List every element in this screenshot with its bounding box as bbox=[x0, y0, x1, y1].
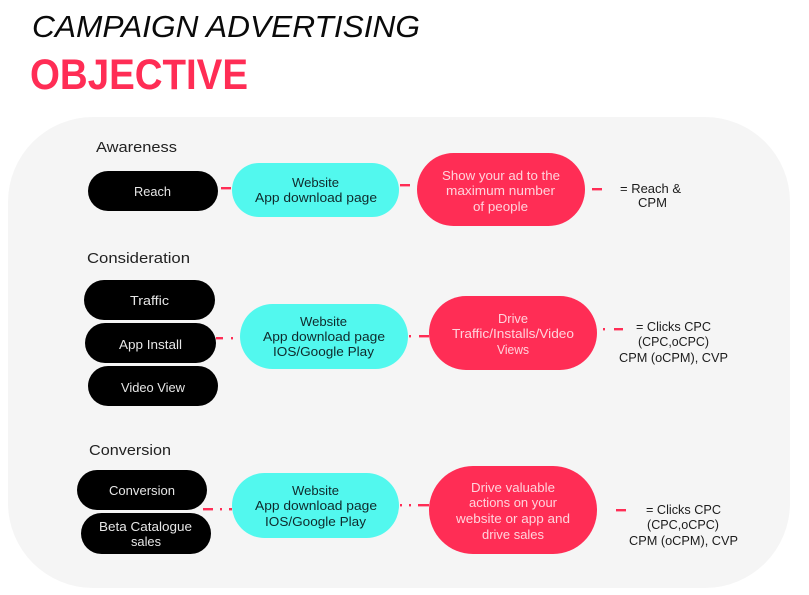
pill: placement: IOS/Google Play bbox=[273, 345, 375, 359]
heading: conversion: Conversion bbox=[89, 442, 171, 459]
pill: reach bbox=[88, 171, 218, 211]
pill: video view bbox=[88, 366, 218, 406]
pill: placement bbox=[232, 473, 399, 538]
pill: goal bbox=[417, 153, 585, 226]
metric text bbox=[629, 503, 738, 548]
metric text: = Reach & bbox=[620, 182, 682, 196]
panel: objectives background bbox=[8, 117, 790, 588]
connector: objectives to placement bbox=[216, 337, 233, 339]
connector: objectives to placement bbox=[203, 508, 232, 510]
title: OBJECTIVE bbox=[30, 51, 248, 99]
metric text: (CPC,oCPC) bbox=[638, 335, 709, 349]
pill: traffic: Traffic bbox=[130, 294, 169, 308]
connector: placement to goal bbox=[400, 184, 410, 186]
title: CAMPAIGN ADVERTISING bbox=[32, 9, 420, 44]
pill: placement bbox=[240, 304, 408, 369]
pill: conversion: Conversion bbox=[109, 484, 175, 498]
pill: beta catalogue sales: sales bbox=[131, 535, 161, 549]
pill: beta catalogue sales bbox=[81, 513, 211, 554]
pill: placement: IOS/Google Play bbox=[265, 515, 367, 529]
connector: reach to placement bbox=[221, 187, 231, 189]
metric text: CPM (oCPM), CVP bbox=[619, 351, 728, 365]
title bbox=[30, 9, 420, 99]
pill: goal: Show your ad to the bbox=[442, 169, 560, 183]
pill: app install bbox=[85, 323, 216, 363]
pill: app install: App Install bbox=[119, 338, 182, 352]
pill: goal: Drive bbox=[498, 312, 528, 326]
pill: goal: drive sales bbox=[482, 528, 544, 542]
pill: placement: App download page bbox=[255, 499, 377, 513]
pill: goal: Views bbox=[497, 343, 529, 357]
pill: goal: website or app and bbox=[455, 512, 570, 526]
pill: video view: Video View bbox=[121, 381, 186, 395]
pill: conversion bbox=[77, 470, 207, 510]
pill: goal bbox=[429, 466, 597, 554]
heading: consideration: Consideration bbox=[87, 250, 190, 267]
pill: beta catalogue sales: Beta Catalogue bbox=[99, 520, 192, 534]
pill: placement: App download page bbox=[263, 330, 385, 344]
metric text: = Clicks CPC bbox=[646, 503, 721, 517]
metric text: = Clicks CPC bbox=[636, 320, 711, 334]
connector: goal to metric bbox=[592, 188, 602, 190]
section: awareness bbox=[88, 139, 682, 226]
pill: goal: maximum number bbox=[446, 184, 555, 198]
pill: goal bbox=[429, 296, 597, 370]
connector: goal to metric bbox=[603, 328, 623, 330]
pill: goal: Drive valuable bbox=[471, 481, 555, 495]
section: consideration bbox=[84, 250, 728, 406]
pill: placement: Website bbox=[292, 484, 339, 498]
metric text bbox=[620, 182, 682, 210]
connector: placement to goal bbox=[400, 504, 429, 506]
pill: placement: App download page bbox=[255, 191, 377, 205]
pill: goal: Traffic/Installs/Video bbox=[452, 327, 574, 341]
heading: awareness: Awareness bbox=[96, 139, 177, 156]
metric text: CPM (oCPM), CVP bbox=[629, 534, 738, 548]
metric text: (CPC,oCPC) bbox=[647, 518, 719, 532]
pill: placement bbox=[232, 163, 399, 217]
pill: placement: Website bbox=[300, 315, 347, 329]
section: conversion bbox=[77, 442, 738, 554]
pill: goal: of people bbox=[473, 200, 528, 214]
connector: placement to goal bbox=[409, 335, 429, 337]
metric text: CPM bbox=[638, 196, 667, 210]
pill: goal: actions on your bbox=[469, 496, 557, 510]
pill: placement: Website bbox=[292, 176, 339, 190]
pill: reach: Reach bbox=[134, 185, 171, 199]
connector: goal to metric bbox=[616, 509, 626, 511]
metric text bbox=[619, 320, 728, 365]
pill: traffic bbox=[84, 280, 215, 320]
